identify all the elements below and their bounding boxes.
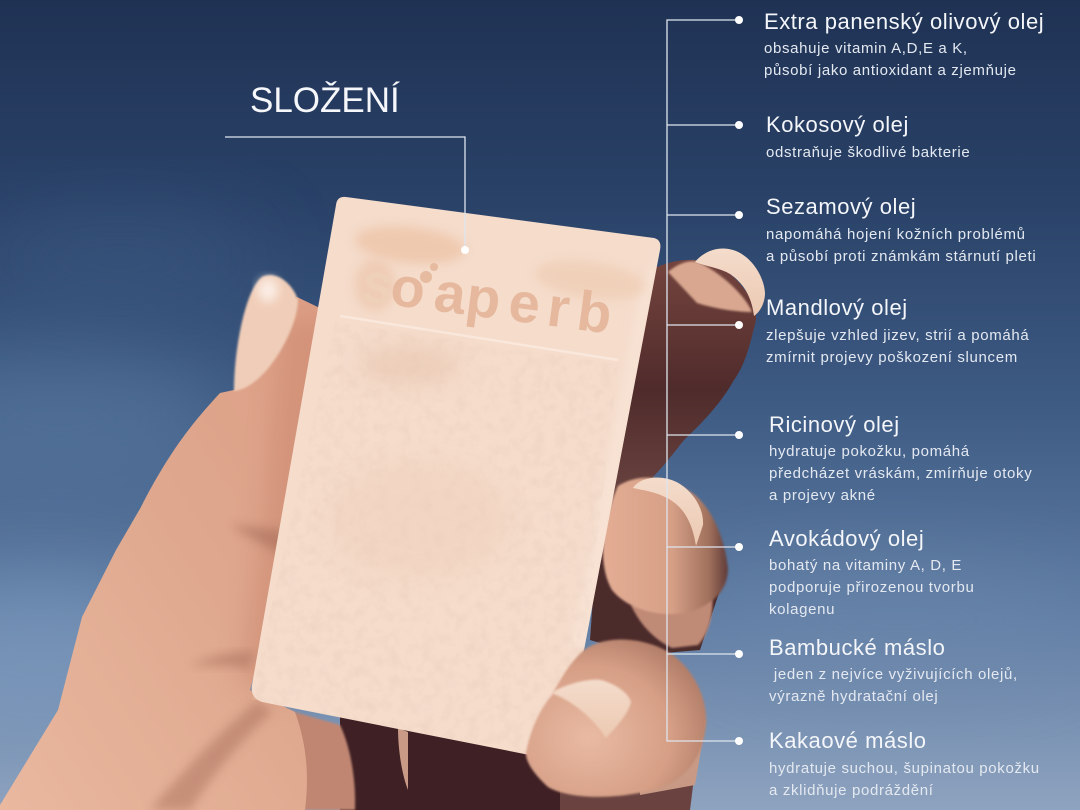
ingredient: almond oil	[766, 295, 1029, 366]
ingredient: castor oil: hydratuje pokožku, pomáhá	[769, 443, 970, 460]
upper finger in shadow	[600, 260, 756, 520]
ingredient: shea butter: výrazně hydratační olej	[769, 688, 938, 705]
lower palm bulge	[250, 705, 355, 810]
left fingernail	[234, 275, 298, 391]
ingredient: castor oil: předcházet vráskám, zmírňuje otoky	[769, 465, 1032, 482]
ingredient: cocoa butter: hydratuje suchou, šupinatou pokožku	[769, 760, 1040, 777]
thumb	[526, 640, 706, 797]
upper fingernail	[695, 248, 765, 316]
soap shaded patch	[360, 347, 460, 383]
ingredient: cocoa butter	[769, 728, 1040, 799]
ingredient: olive oil: působí jako antioxidant a zjemňuje	[764, 62, 1017, 79]
ingredient: avocado oil: bohatý na vitaminy A, D, E	[769, 557, 962, 574]
soap logo bubbles	[420, 263, 438, 283]
shadow under soap	[255, 690, 640, 810]
title: SLOŽENÍ	[250, 81, 400, 120]
soap texture	[250, 322, 618, 762]
ingredient: castor oil: Ricinový olej	[769, 412, 900, 437]
ingredient: castor oil	[769, 412, 1032, 504]
ingredient: olive oil: obsahuje vitamin A,D,E a K,	[764, 40, 968, 57]
soap peach patches	[354, 224, 464, 266]
lower middle finger	[631, 595, 712, 648]
soap side highlights	[579, 256, 659, 649]
hand	[0, 248, 765, 810]
thumbnail	[551, 680, 631, 738]
soap logo ridge	[340, 316, 618, 360]
middle finger	[603, 478, 728, 614]
upper finger lit top	[668, 261, 752, 312]
ingredient: avocado oil	[769, 526, 974, 618]
ingredient: almond oil: Mandlový olej	[766, 295, 908, 320]
lower right shadow	[560, 770, 695, 810]
ingredient: olive oil	[764, 9, 1044, 79]
thumb with nail	[526, 640, 706, 797]
soap logo text: soaperb	[358, 250, 616, 345]
light fold	[398, 728, 408, 790]
connector dots	[461, 16, 743, 745]
ingredient: avocado oil: podporuje přirozenou tvorbu	[769, 579, 974, 596]
ingredient: avocado oil: kolagenu	[769, 601, 835, 618]
thumb underside	[640, 720, 706, 795]
ingredient: olive oil: Extra panenský olivový olej	[764, 9, 1044, 34]
ingredient: shea butter	[769, 635, 1018, 705]
ingredient: avocado oil: Avokádový olej	[769, 526, 924, 551]
ingredient: coconut oil: Kokosový olej	[766, 112, 909, 137]
palm shading	[152, 324, 314, 810]
soap bar	[250, 197, 662, 762]
ingredient: sesame oil: napomáhá hojení kožních problémů	[766, 226, 1026, 243]
ingredient: coconut oil: odstraňuje škodlivé bakterie	[766, 144, 970, 161]
ingredient: coconut oil	[766, 112, 970, 161]
soap body	[252, 197, 660, 762]
middle fingernail	[633, 478, 703, 546]
shadow behind fingers	[590, 500, 720, 655]
ingredient: cocoa butter: a zklidňuje podráždění	[769, 782, 934, 799]
ingredient: sesame oil: Sezamový olej	[766, 194, 916, 219]
connector lines	[225, 20, 739, 741]
ingredient: cocoa butter: Kakaové máslo	[769, 728, 927, 753]
ingredient: shea butter: Bambucké máslo	[769, 635, 945, 660]
ingredient: sesame oil	[766, 194, 1036, 265]
ingredient: almond oil: zlepšuje vzhled jizev, strií a pomáhá	[766, 327, 1029, 344]
palm	[0, 297, 340, 810]
ingredient: sesame oil: a působí proti známkám stárnutí pleti	[766, 248, 1036, 265]
ingredient: shea butter: jeden z nejvíce vyživujících olejů,	[774, 666, 1018, 683]
ingredient: almond oil: zmírnit projevy poškození sluncem	[766, 349, 1018, 366]
ingredient: castor oil: a projevy akné	[769, 487, 876, 504]
